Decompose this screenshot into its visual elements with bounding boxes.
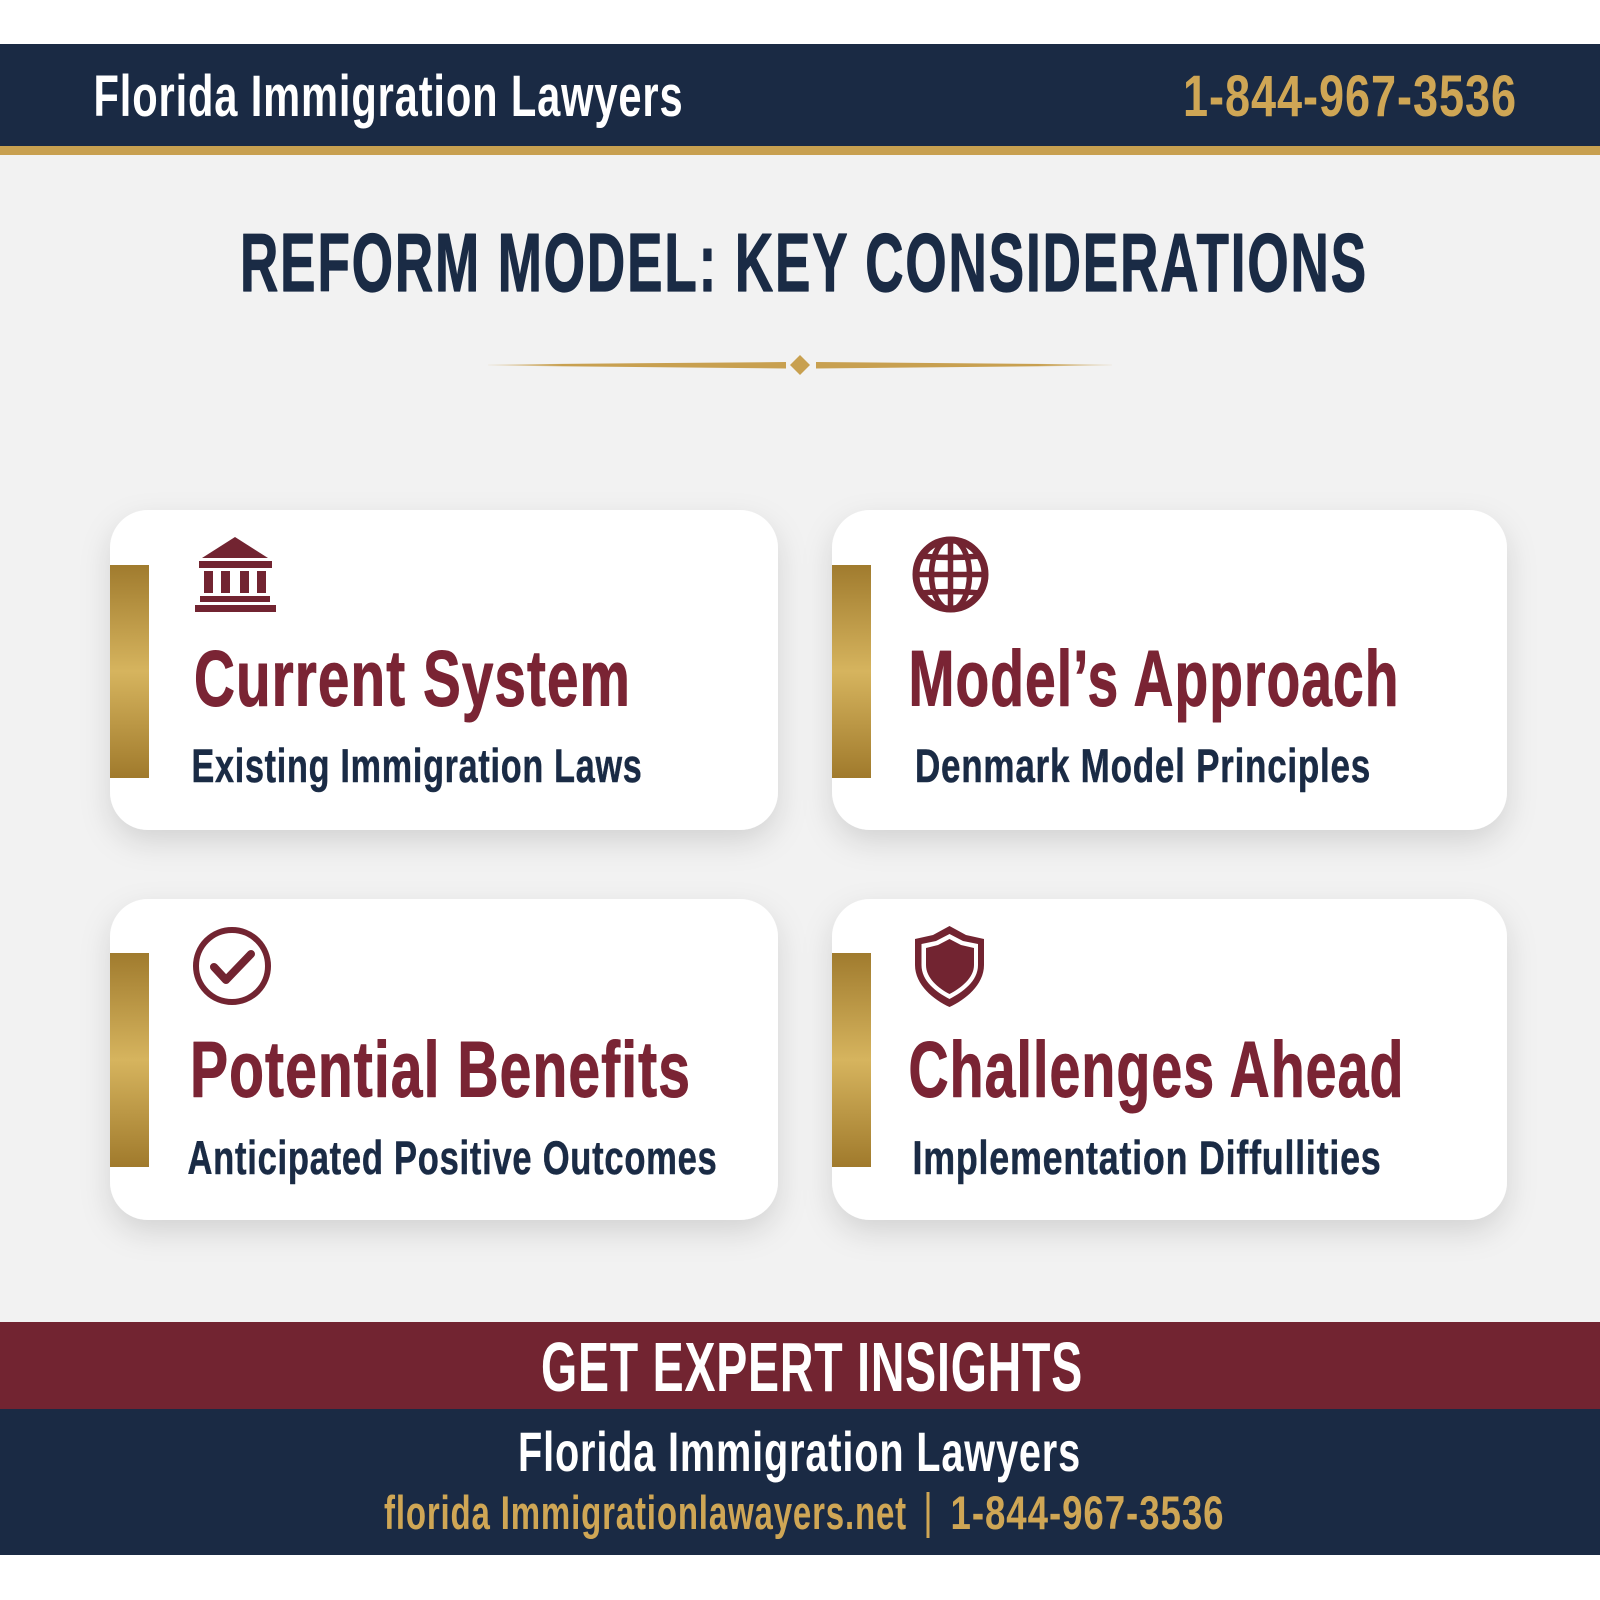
footer website: florida Immigrationlawayers.net [384,1486,907,1539]
footer phone number: 1-844-967-3536 [950,1486,1224,1539]
gold accent bar [110,565,149,778]
page background [0,155,1600,1325]
title divider with diamond [488,355,1112,375]
footer separator [926,1492,930,1538]
panel: potential benefits [110,899,778,1220]
subheading: Implementation Diffullities [912,1131,1382,1184]
footer contact band [0,1409,1600,1555]
panel: model's approach [832,510,1507,830]
panel: challenges ahead [832,899,1507,1220]
gold accent bar [110,953,149,1167]
gold accent bar [832,565,871,778]
icon: check mark in circle [196,930,268,1002]
gold accent bar [832,953,871,1167]
call to action banner [0,1322,1600,1409]
heading: Model’s Approach [908,634,1400,722]
panel: current system [110,510,778,830]
subheading: Existing Immigration Laws [192,739,642,792]
icon: shield [915,926,984,1007]
heading: Current System [194,634,631,722]
heading: Potential Benefits [190,1024,691,1114]
header phone number: 1-844-967-3536 [1183,64,1517,129]
header bar [0,44,1600,155]
footer firm name: Florida Immigration Lawyers [518,1420,1081,1483]
subheading: Denmark Model Principles [915,739,1371,792]
icon: courthouse [195,537,276,612]
icon: globe [915,539,986,610]
call to action text: GET EXPERT INSIGHTS [541,1328,1083,1406]
subheading: Anticipated Positive Outcomes [188,1131,718,1184]
header firm name: Florida Immigration Lawyers [94,64,684,129]
heading: Challenges Ahead [908,1024,1404,1114]
